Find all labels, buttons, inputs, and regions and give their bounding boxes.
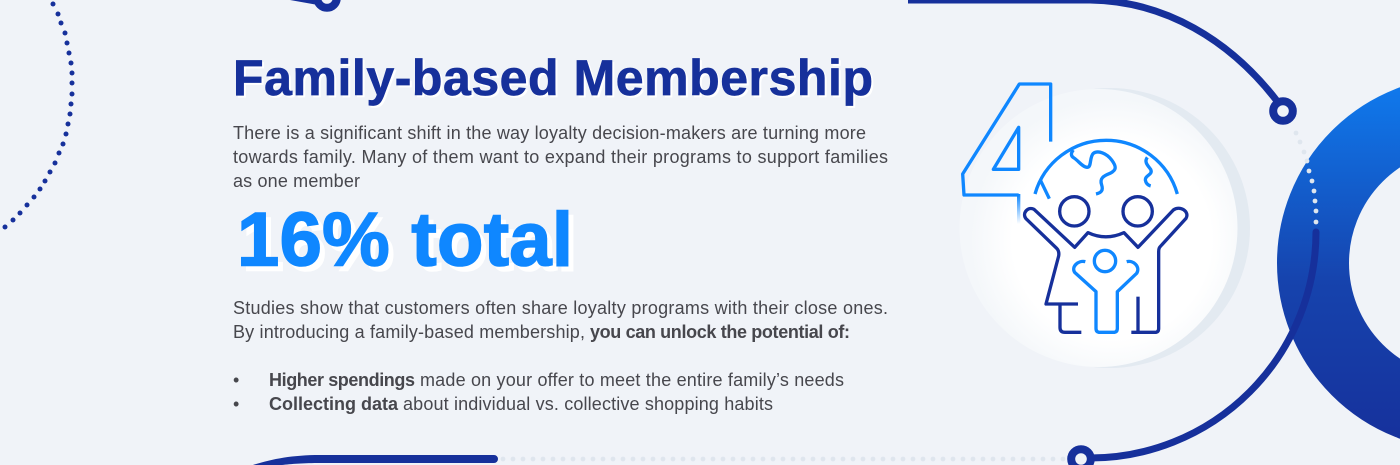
title: Family-based Membership: [233, 50, 873, 106]
top-left connector node: [290, 0, 337, 8]
bullet: collecting data: Collecting data: [269, 394, 399, 414]
bullet: higher spendings: [233, 370, 844, 390]
bullet: collecting data: [233, 394, 773, 414]
bullet: collecting data: •: [233, 394, 239, 414]
globe: [1035, 140, 1177, 199]
number 4 outline: [963, 84, 1051, 224]
icon disc: [960, 88, 1250, 368]
large gradient ring: [1313, 112, 1400, 414]
bullet: higher spendings: •: [233, 370, 239, 390]
bullet: higher spendings: made on your offer to meet the entire family’s needs: [420, 370, 844, 390]
intro paragraph: There is a significant shift in the way loyalty decision-makers are turning more: [233, 123, 866, 143]
bullet: higher spendings: Higher spendings: [269, 370, 415, 390]
icon: number 4 outline, globe and family: [963, 84, 1187, 332]
bullet: collecting data: about individual vs. collective shopping habits: [403, 394, 773, 414]
big statistic: 16% total: [237, 198, 573, 282]
intro paragraph: towards family. Many of them want to expand their programs to support families: [233, 147, 888, 167]
decorative left dotted arc: [2, 2, 74, 230]
bottom dotted line: [501, 457, 1065, 461]
studies paragraph: Studies show that customers often share loyalty programs with their close ones.: [233, 298, 888, 318]
top-right arc with node: [908, 0, 1293, 121]
studies paragraph: By introducing a family-based membership,: [233, 322, 585, 342]
intro paragraph: [233, 123, 888, 191]
intro paragraph: as one member: [233, 171, 360, 191]
bottom-left connector line: [253, 455, 498, 465]
right dotted connector: [1294, 131, 1318, 224]
child figure: [1074, 250, 1138, 332]
bottom-right arc with node: [1071, 232, 1316, 465]
studies paragraph: [233, 298, 888, 342]
studies paragraph: you can unlock the potential of:: [590, 322, 850, 342]
adult figures: [1025, 197, 1187, 332]
